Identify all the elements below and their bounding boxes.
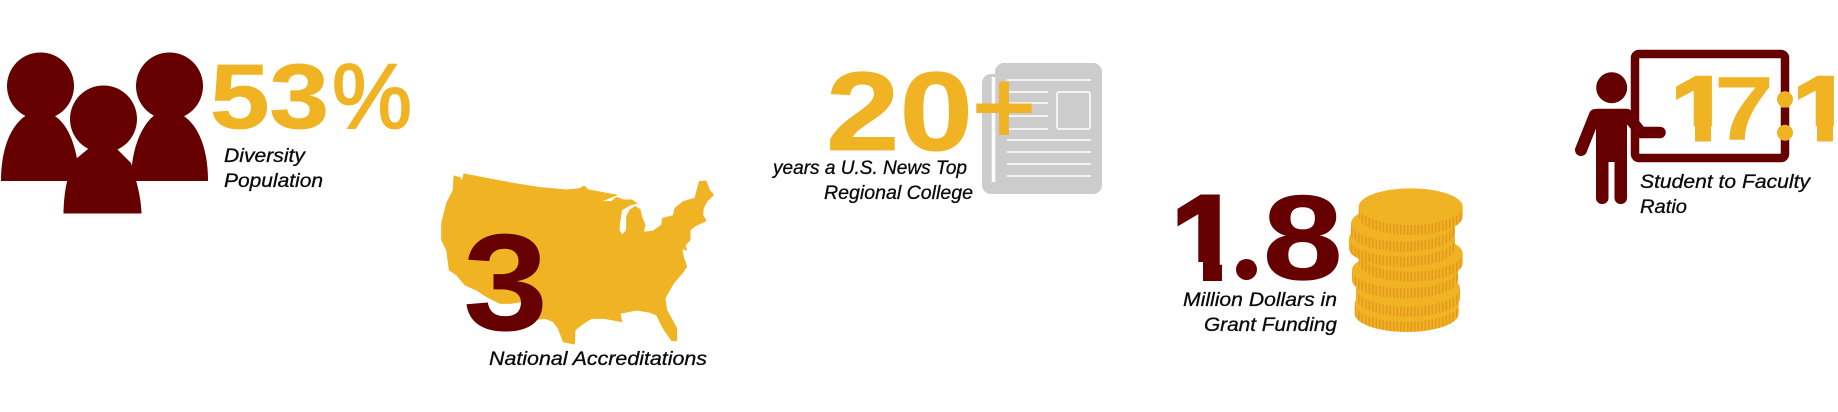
label: years a U.S. News Top Regional College: years a U.S. News Top <box>771 158 967 179</box>
icon: three people <box>1 52 208 214</box>
label: diversity population <box>224 146 323 192</box>
icon: newspaper <box>982 63 1102 194</box>
stat: 1.8: . <box>1232 183 1261 300</box>
panel: accreditations <box>442 174 713 370</box>
stat: 53% <box>210 46 412 148</box>
label: student to faculty ratio: Student to Faculty <box>1640 172 1812 193</box>
stat: 53%: % <box>332 46 412 148</box>
stat: 20+ <box>826 49 1036 174</box>
icon: US map <box>442 174 713 344</box>
stat: 20+: 20 <box>826 49 973 174</box>
label: years a U.S. News Top Regional College <box>771 158 973 204</box>
label: student to faculty ratio <box>1640 172 1812 218</box>
label: national accreditations: National Accreditations <box>489 349 708 370</box>
stat: 1.8: 1 <box>1171 171 1241 305</box>
stat: 17:1: 1 <box>1670 59 1730 160</box>
stat: 20+: + <box>972 49 1036 166</box>
label: diversity population: Population <box>224 171 323 192</box>
label: student to faculty ratio: Ratio <box>1640 197 1687 218</box>
stat: 17:1: 7 <box>1714 59 1774 160</box>
label: million dollars in grant funding: Grant Funding <box>1204 315 1337 336</box>
stat: 53%: 53 <box>210 46 329 148</box>
label: million dollars in grant funding: Million Dollars in <box>1183 290 1337 311</box>
stat: 17:1 <box>1676 76 1834 142</box>
label: diversity population: Diversity <box>224 146 307 167</box>
label: years a U.S. News Top Regional College: Regional College <box>824 183 973 204</box>
stat: 17:1: : <box>1774 63 1796 158</box>
icon: teacher at board <box>1581 54 1785 204</box>
panel: student faculty ratio <box>1581 54 1838 218</box>
stat: 3: 3 <box>463 206 548 360</box>
stat: 1.8 <box>1178 194 1339 281</box>
stat: 1.8: 8 <box>1263 171 1342 305</box>
panel: grant funding <box>1178 188 1463 336</box>
label: million dollars in grant funding <box>1183 290 1337 336</box>
icon: coin stack <box>1349 188 1463 332</box>
panel: US News ranking <box>771 49 1102 204</box>
panel: diversity <box>1 46 412 214</box>
